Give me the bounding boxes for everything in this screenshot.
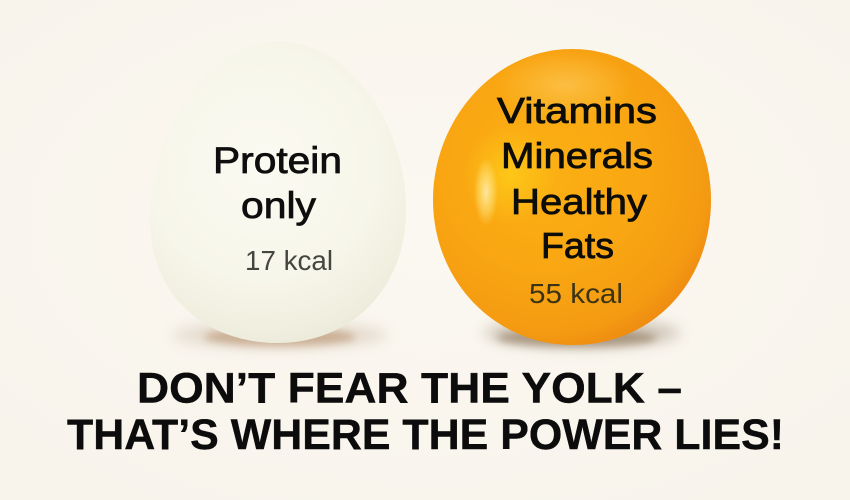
yolk highlight — [474, 158, 498, 226]
egg white contact shadow — [204, 328, 356, 346]
yolk top glow — [497, 51, 633, 119]
yolk side glow — [464, 125, 556, 225]
egg white calories: 17 kcal — [245, 245, 333, 276]
egg white — [150, 42, 406, 349]
yolk wide shadow — [484, 318, 680, 348]
yolk contact shadow — [497, 329, 657, 347]
yolk label: Healthy — [511, 181, 648, 222]
headline: DON’T FEAR THE YOLK – — [137, 366, 682, 412]
egg white label: Protein — [213, 139, 342, 181]
yolk calories: 55 kcal — [529, 278, 623, 309]
egg white label line two: only — [241, 184, 316, 226]
yolk label — [497, 90, 657, 266]
yolk label: Fats — [541, 225, 614, 266]
yolk shape — [433, 49, 711, 345]
yolk label: Minerals — [501, 135, 653, 176]
yolk label: Vitamins — [497, 90, 657, 131]
egg white shape — [150, 42, 406, 343]
headline — [67, 366, 784, 459]
egg yolk — [433, 49, 711, 348]
headline: THAT’S WHERE THE POWER LIES! — [67, 412, 784, 459]
egg white wide shadow — [172, 321, 388, 349]
